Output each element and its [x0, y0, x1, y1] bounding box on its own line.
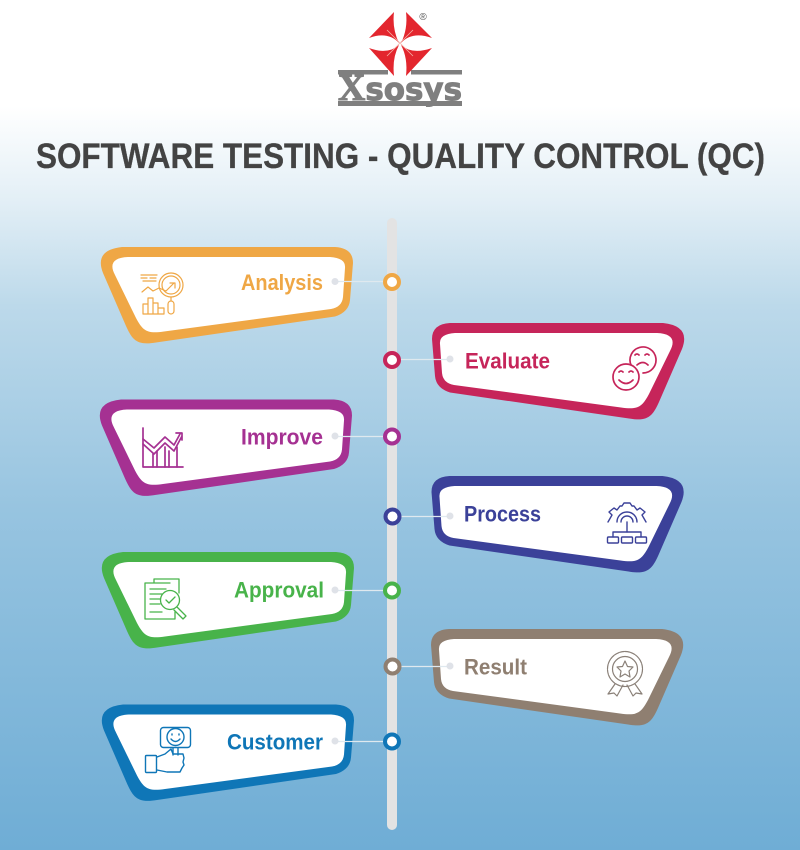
icon: award ribbon [608, 652, 642, 696]
card shape [102, 552, 354, 648]
connector and dot [332, 586, 384, 594]
logo wordmark: Xsosys [338, 67, 462, 109]
timeline node [385, 734, 399, 748]
timeline bar [387, 218, 397, 830]
label: Analysis [241, 270, 323, 295]
icon: growth chart [143, 428, 183, 467]
connector and dot [400, 662, 454, 670]
connector and dot [400, 512, 454, 520]
logo: Xsosys [338, 12, 462, 109]
logo bars [338, 70, 462, 106]
label: Result [464, 654, 528, 680]
panel: Analysis [101, 247, 399, 343]
card shape [432, 476, 684, 572]
connector and dot [332, 432, 384, 440]
label: Customer [227, 730, 323, 754]
connector and dot [332, 278, 384, 285]
timeline node [385, 430, 399, 444]
panel: Result [386, 629, 683, 725]
timeline node [385, 275, 399, 289]
timeline node [385, 353, 399, 367]
panel: Customer [102, 704, 399, 801]
connector and dot [332, 738, 384, 744]
label: Approval [234, 578, 324, 602]
timeline node [386, 660, 400, 674]
timeline node [385, 584, 399, 598]
label: Improve [241, 424, 323, 450]
card shape [101, 247, 353, 343]
registered mark: ® [419, 12, 427, 23]
icon: analysis chart and magnifier [141, 273, 183, 314]
card shape [431, 629, 683, 725]
icon: hand holding smiley sign [146, 728, 190, 772]
panel: Evaluate [385, 323, 684, 419]
timeline node [386, 510, 400, 524]
label: Evaluate [465, 348, 550, 374]
card shape [432, 323, 684, 419]
connector and dot [400, 356, 454, 362]
icon: red four-petal mark [369, 12, 432, 76]
panel: Approval [102, 552, 399, 648]
icon: two faces [613, 347, 656, 390]
icon: document check [145, 579, 186, 619]
icon: gear and hierarchy [608, 503, 646, 543]
panel: Improve [100, 400, 399, 496]
card shape [102, 704, 354, 801]
card shape [100, 400, 352, 496]
label: Process [464, 502, 541, 526]
panel: Process [386, 476, 684, 572]
